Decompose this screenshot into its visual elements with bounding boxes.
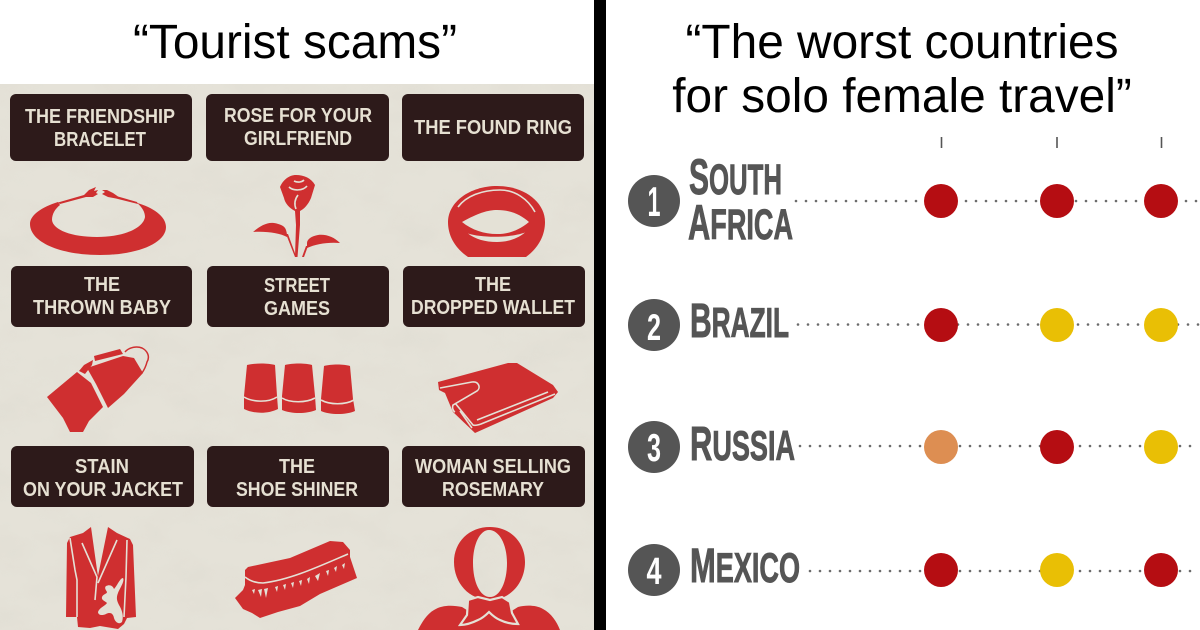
label: rose for your girlfriend: ROSE FOR YOUR bbox=[224, 105, 372, 127]
icon: thrown baby bbox=[47, 347, 148, 432]
icon: rose bbox=[253, 175, 340, 257]
label: rose for your girlfriend bbox=[206, 94, 389, 161]
tick marks bbox=[942, 137, 1162, 148]
icon: dropped wallet bbox=[438, 363, 558, 433]
rank badge 3: 3 bbox=[647, 427, 661, 470]
rank badge 4: 4 bbox=[646, 551, 662, 593]
panel: tourist scams background bbox=[0, 84, 594, 630]
icon: stained jacket bbox=[66, 527, 136, 629]
label: the thrown baby: THROWN BABY bbox=[33, 297, 172, 319]
dotted line and markers bbox=[800, 430, 1200, 464]
label: the found ring bbox=[402, 94, 584, 161]
label: woman selling rosemary: WOMAN SELLING bbox=[415, 456, 571, 478]
icon: three cups bbox=[244, 364, 355, 414]
label: rose for your girlfriend: GIRLFRIEND bbox=[244, 128, 352, 150]
label: woman selling rosemary: ROSEMARY bbox=[442, 479, 545, 501]
country name: Brazil: BRAZIL bbox=[690, 295, 789, 348]
label: the shoe shiner bbox=[207, 446, 389, 507]
rank badge 3 bbox=[628, 421, 680, 473]
dotted line and markers bbox=[810, 553, 1200, 587]
country name: South Africa bbox=[688, 149, 793, 250]
row: 2 Brazil bbox=[628, 295, 1200, 351]
country name: South Africa: SOUTH bbox=[689, 149, 782, 205]
label: the found ring: THE FOUND RING bbox=[414, 117, 572, 139]
label: woman selling rosemary bbox=[402, 446, 585, 507]
label: stain on your jacket bbox=[11, 446, 194, 507]
rank badge 2: 2 bbox=[647, 307, 661, 348]
label: the friendship bracelet: THE FRIENDSHIP bbox=[25, 106, 175, 128]
row: 3 Russia bbox=[628, 418, 1200, 473]
icon: found ring bbox=[448, 186, 545, 257]
rank badge 1 bbox=[628, 175, 680, 227]
label: the shoe shiner: SHOE SHINER bbox=[236, 479, 358, 501]
dotted line and markers bbox=[796, 184, 1200, 218]
label: the shoe shiner: THE bbox=[279, 456, 315, 478]
label: street games: STREET bbox=[264, 275, 330, 297]
label: the dropped wallet: DROPPED WALLET bbox=[411, 297, 575, 319]
label: stain on your jacket: ON YOUR JACKET bbox=[23, 479, 183, 501]
country name: Mexico: MEXICO bbox=[690, 540, 800, 593]
label: the dropped wallet: THE bbox=[475, 274, 511, 296]
label: the thrown baby bbox=[11, 266, 192, 327]
label: street games bbox=[207, 266, 389, 327]
label: stain on your jacket: STAIN bbox=[75, 456, 129, 478]
label: street games: GAMES bbox=[264, 298, 330, 320]
label: the dropped wallet bbox=[403, 266, 585, 327]
dotted line and markers bbox=[798, 308, 1200, 342]
rank badge 2 bbox=[628, 299, 680, 351]
icon: shoe brush bbox=[235, 541, 357, 618]
label: the friendship bracelet: BRACELET bbox=[54, 129, 146, 151]
rank badge 1: 1 bbox=[648, 178, 660, 225]
row: 1 South Africa bbox=[628, 149, 1200, 250]
title: worst countries: “The worst countries bbox=[686, 16, 1118, 69]
country name: South Africa: AFRICA bbox=[688, 196, 793, 250]
icon: woman selling rosemary bbox=[418, 527, 560, 630]
label: the thrown baby: THE bbox=[84, 274, 120, 296]
divider bbox=[594, 0, 606, 630]
icon: friendship bracelet bbox=[30, 187, 166, 255]
label: the friendship bracelet bbox=[10, 94, 192, 161]
rank badge 4 bbox=[628, 544, 680, 596]
title: tourist scams: “Tourist scams” bbox=[133, 16, 457, 69]
title: worst countries: for solo female travel” bbox=[672, 70, 1132, 123]
country name: Russia: RUSSIA bbox=[690, 418, 795, 471]
title: worst countries bbox=[672, 16, 1132, 123]
row: 4 Mexico bbox=[628, 540, 1200, 596]
